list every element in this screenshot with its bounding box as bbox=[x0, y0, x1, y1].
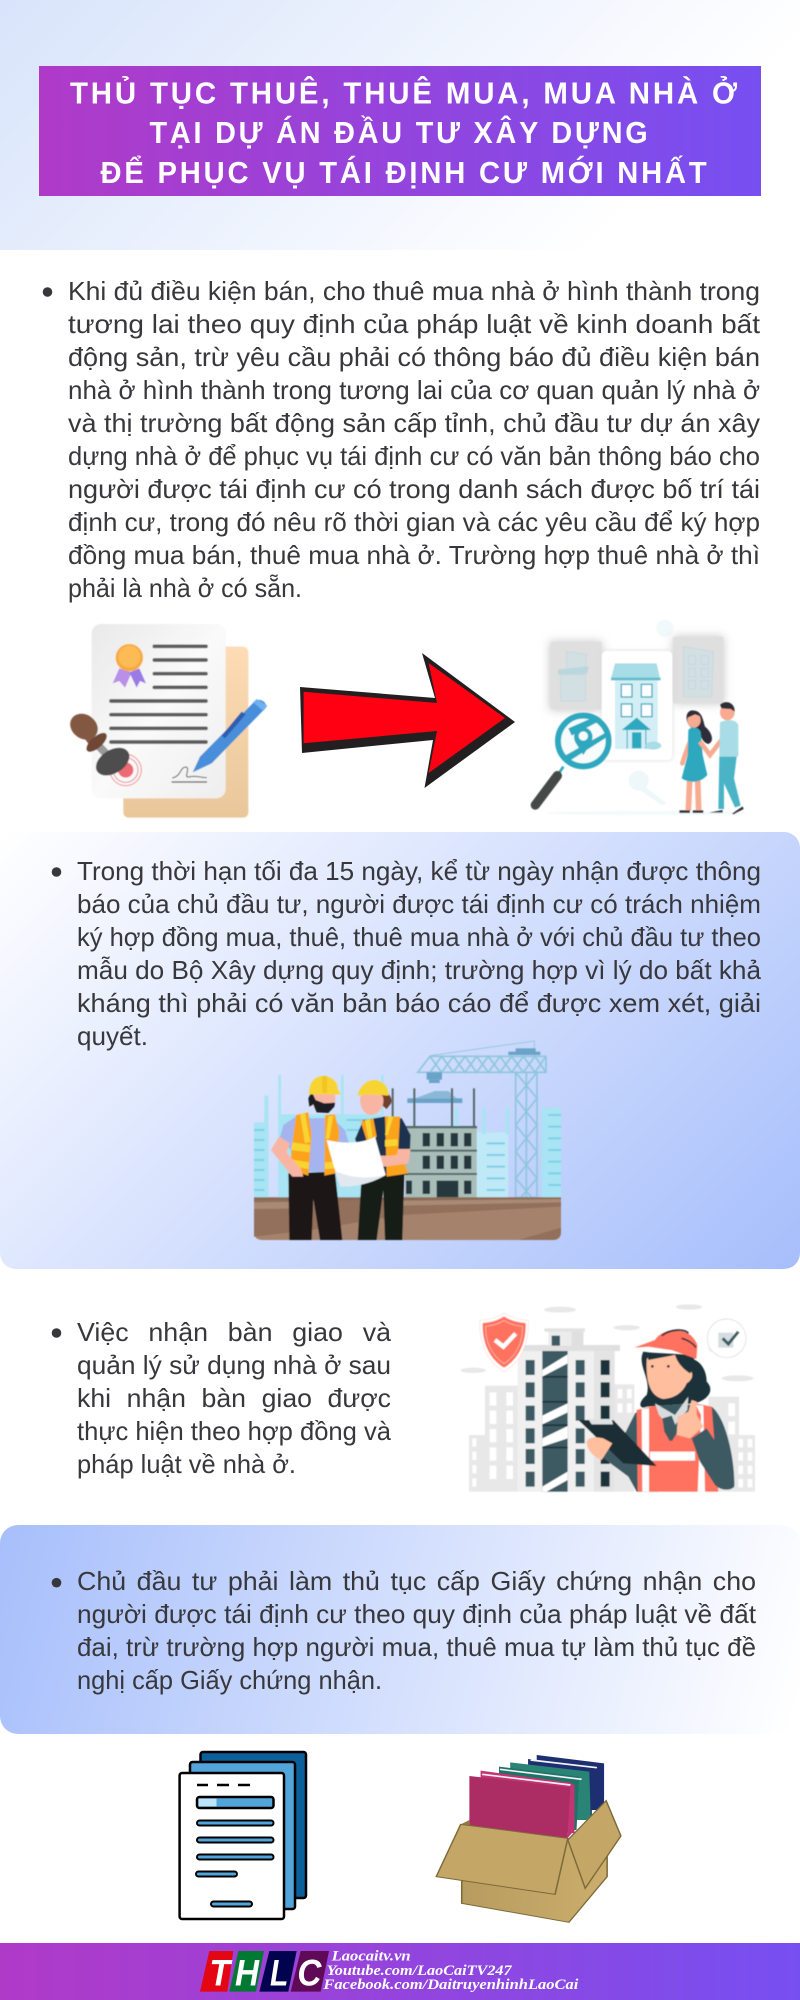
arrow: big red arrow bbox=[300, 653, 515, 788]
title banner: ĐỂ PHỤC VỤ TÁI ĐỊNH CƯ MỚI NHẤT bbox=[100, 154, 710, 190]
logo: THLC station mark and links: T bbox=[209, 1952, 233, 1994]
panel: certificate procedure bbox=[0, 1525, 800, 1734]
panel: 15-day signing deadline bbox=[0, 832, 800, 1269]
text block: third paragraph: khi nhận bàn giao được bbox=[77, 1383, 391, 1413]
logo: THLC station mark and links: L bbox=[270, 1952, 288, 1994]
text block: second paragraph: ký hợp đồng mua, thuê, thuê mua nhà ở với chủ đầu tư theo bbox=[77, 922, 761, 952]
text block: first paragraph: Khi đủ điều kiện bán, cho thuê mua nhà ở hình thành trong bbox=[68, 276, 760, 306]
text block: fourth paragraph: Chủ đầu tư phải làm thủ tục cấp Giấy chứng nhận cho bbox=[77, 1566, 756, 1596]
text block: second paragraph: báo của chủ đầu tư, người được tái định cư có trách nhiệm bbox=[77, 889, 761, 919]
logo: THLC station mark and links: Facebook.com/DaitruyenhinhLaoCai bbox=[322, 1977, 578, 1993]
text block: second paragraph: Trong thời hạn tối đa 15 ngày, kể từ ngày nhận được thông bbox=[77, 856, 761, 886]
text block: second paragraph bbox=[52, 856, 762, 1051]
text block: third paragraph: quản lý sử dụng nhà ở sau bbox=[77, 1350, 391, 1380]
text block: first paragraph: nhà ở hình thành trong tương lai của cơ quan quản lý nhà ở bbox=[68, 375, 760, 405]
text block: third paragraph: thực hiện theo hợp đồng và bbox=[77, 1416, 392, 1446]
title banner bbox=[39, 66, 761, 196]
icon: house search with couple bbox=[535, 620, 747, 815]
icon: construction workers reading a blueprint bbox=[254, 1041, 561, 1240]
logo: THLC station mark and links: Laocaitv.vn bbox=[331, 1948, 411, 1964]
icon: inspector with clipboard and apartment tower bbox=[461, 1304, 755, 1492]
icon: signed contract with stamp and pen bbox=[65, 624, 267, 818]
title banner: TẠI DỰ ÁN ĐẦU TƯ XÂY DỰNG bbox=[150, 114, 650, 150]
text block: fourth paragraph: nghị cấp Giấy chứng nhận. bbox=[77, 1665, 382, 1695]
text block: first paragraph: động sản, trừ yêu cầu phải có thông báo đủ điều kiện bán bbox=[68, 342, 760, 372]
logo: THLC station mark and links bbox=[200, 1948, 578, 1994]
icon: stack of documents bbox=[180, 1752, 306, 1919]
text block: third paragraph: pháp luật về nhà ở. bbox=[77, 1449, 296, 1479]
logo: THLC station mark and links: Youtube.com/LaoCaiTV247 bbox=[327, 1963, 512, 1979]
header band bbox=[0, 0, 800, 250]
logo: THLC station mark and links: C bbox=[297, 1952, 322, 1994]
text block: first paragraph: người được tái định cư có trong danh sách được bố trí tái bbox=[68, 474, 760, 504]
text block: first paragraph: tương lai theo quy định của pháp luật về kinh doanh bất bbox=[68, 309, 761, 339]
text block: fourth paragraph: người được tái định cư theo quy định của pháp luật về đất bbox=[77, 1599, 757, 1629]
icon: cardboard box of binders bbox=[436, 1755, 621, 1922]
text block: second paragraph: kháng thì phải có văn bản báo cáo để được xem xét, giải bbox=[77, 988, 761, 1018]
text block: first paragraph: phải là nhà ở có sẵn. bbox=[68, 573, 302, 603]
text block: fourth paragraph: đai, trừ trường hợp người mua, thuê mua tự làm thủ tục đề bbox=[77, 1632, 756, 1662]
footer band bbox=[0, 1943, 800, 2000]
text block: fourth paragraph bbox=[52, 1566, 757, 1695]
text block: first paragraph: định cư, trong đó nêu rõ thời gian và các yêu cầu để ký hợp bbox=[68, 507, 760, 537]
title banner: THỦ TỤC THUÊ, THUÊ MUA, MUA NHÀ Ở bbox=[70, 74, 740, 110]
text block: first paragraph: dựng nhà ở để phục vụ tái định cư có văn bản thông báo cho bbox=[68, 441, 760, 471]
logo: THLC station mark and links: H bbox=[235, 1952, 260, 1994]
text block: first paragraph: và thị trường bất động sản cấp tỉnh, chủ đầu tư dự án xây bbox=[68, 408, 760, 438]
text block: third paragraph: Việc nhận bàn giao và bbox=[77, 1317, 392, 1347]
text block: first paragraph bbox=[43, 276, 761, 603]
text block: first paragraph: đồng mua bán, thuê mua nhà ở. Trường hợp thuê nhà ở thì bbox=[68, 540, 760, 570]
text block: second paragraph: quyết. bbox=[77, 1021, 148, 1051]
text block: third paragraph bbox=[52, 1317, 392, 1479]
text block: second paragraph: mẫu do Bộ Xây dựng quy định; trường hợp vì lý do bất khả bbox=[77, 955, 762, 985]
